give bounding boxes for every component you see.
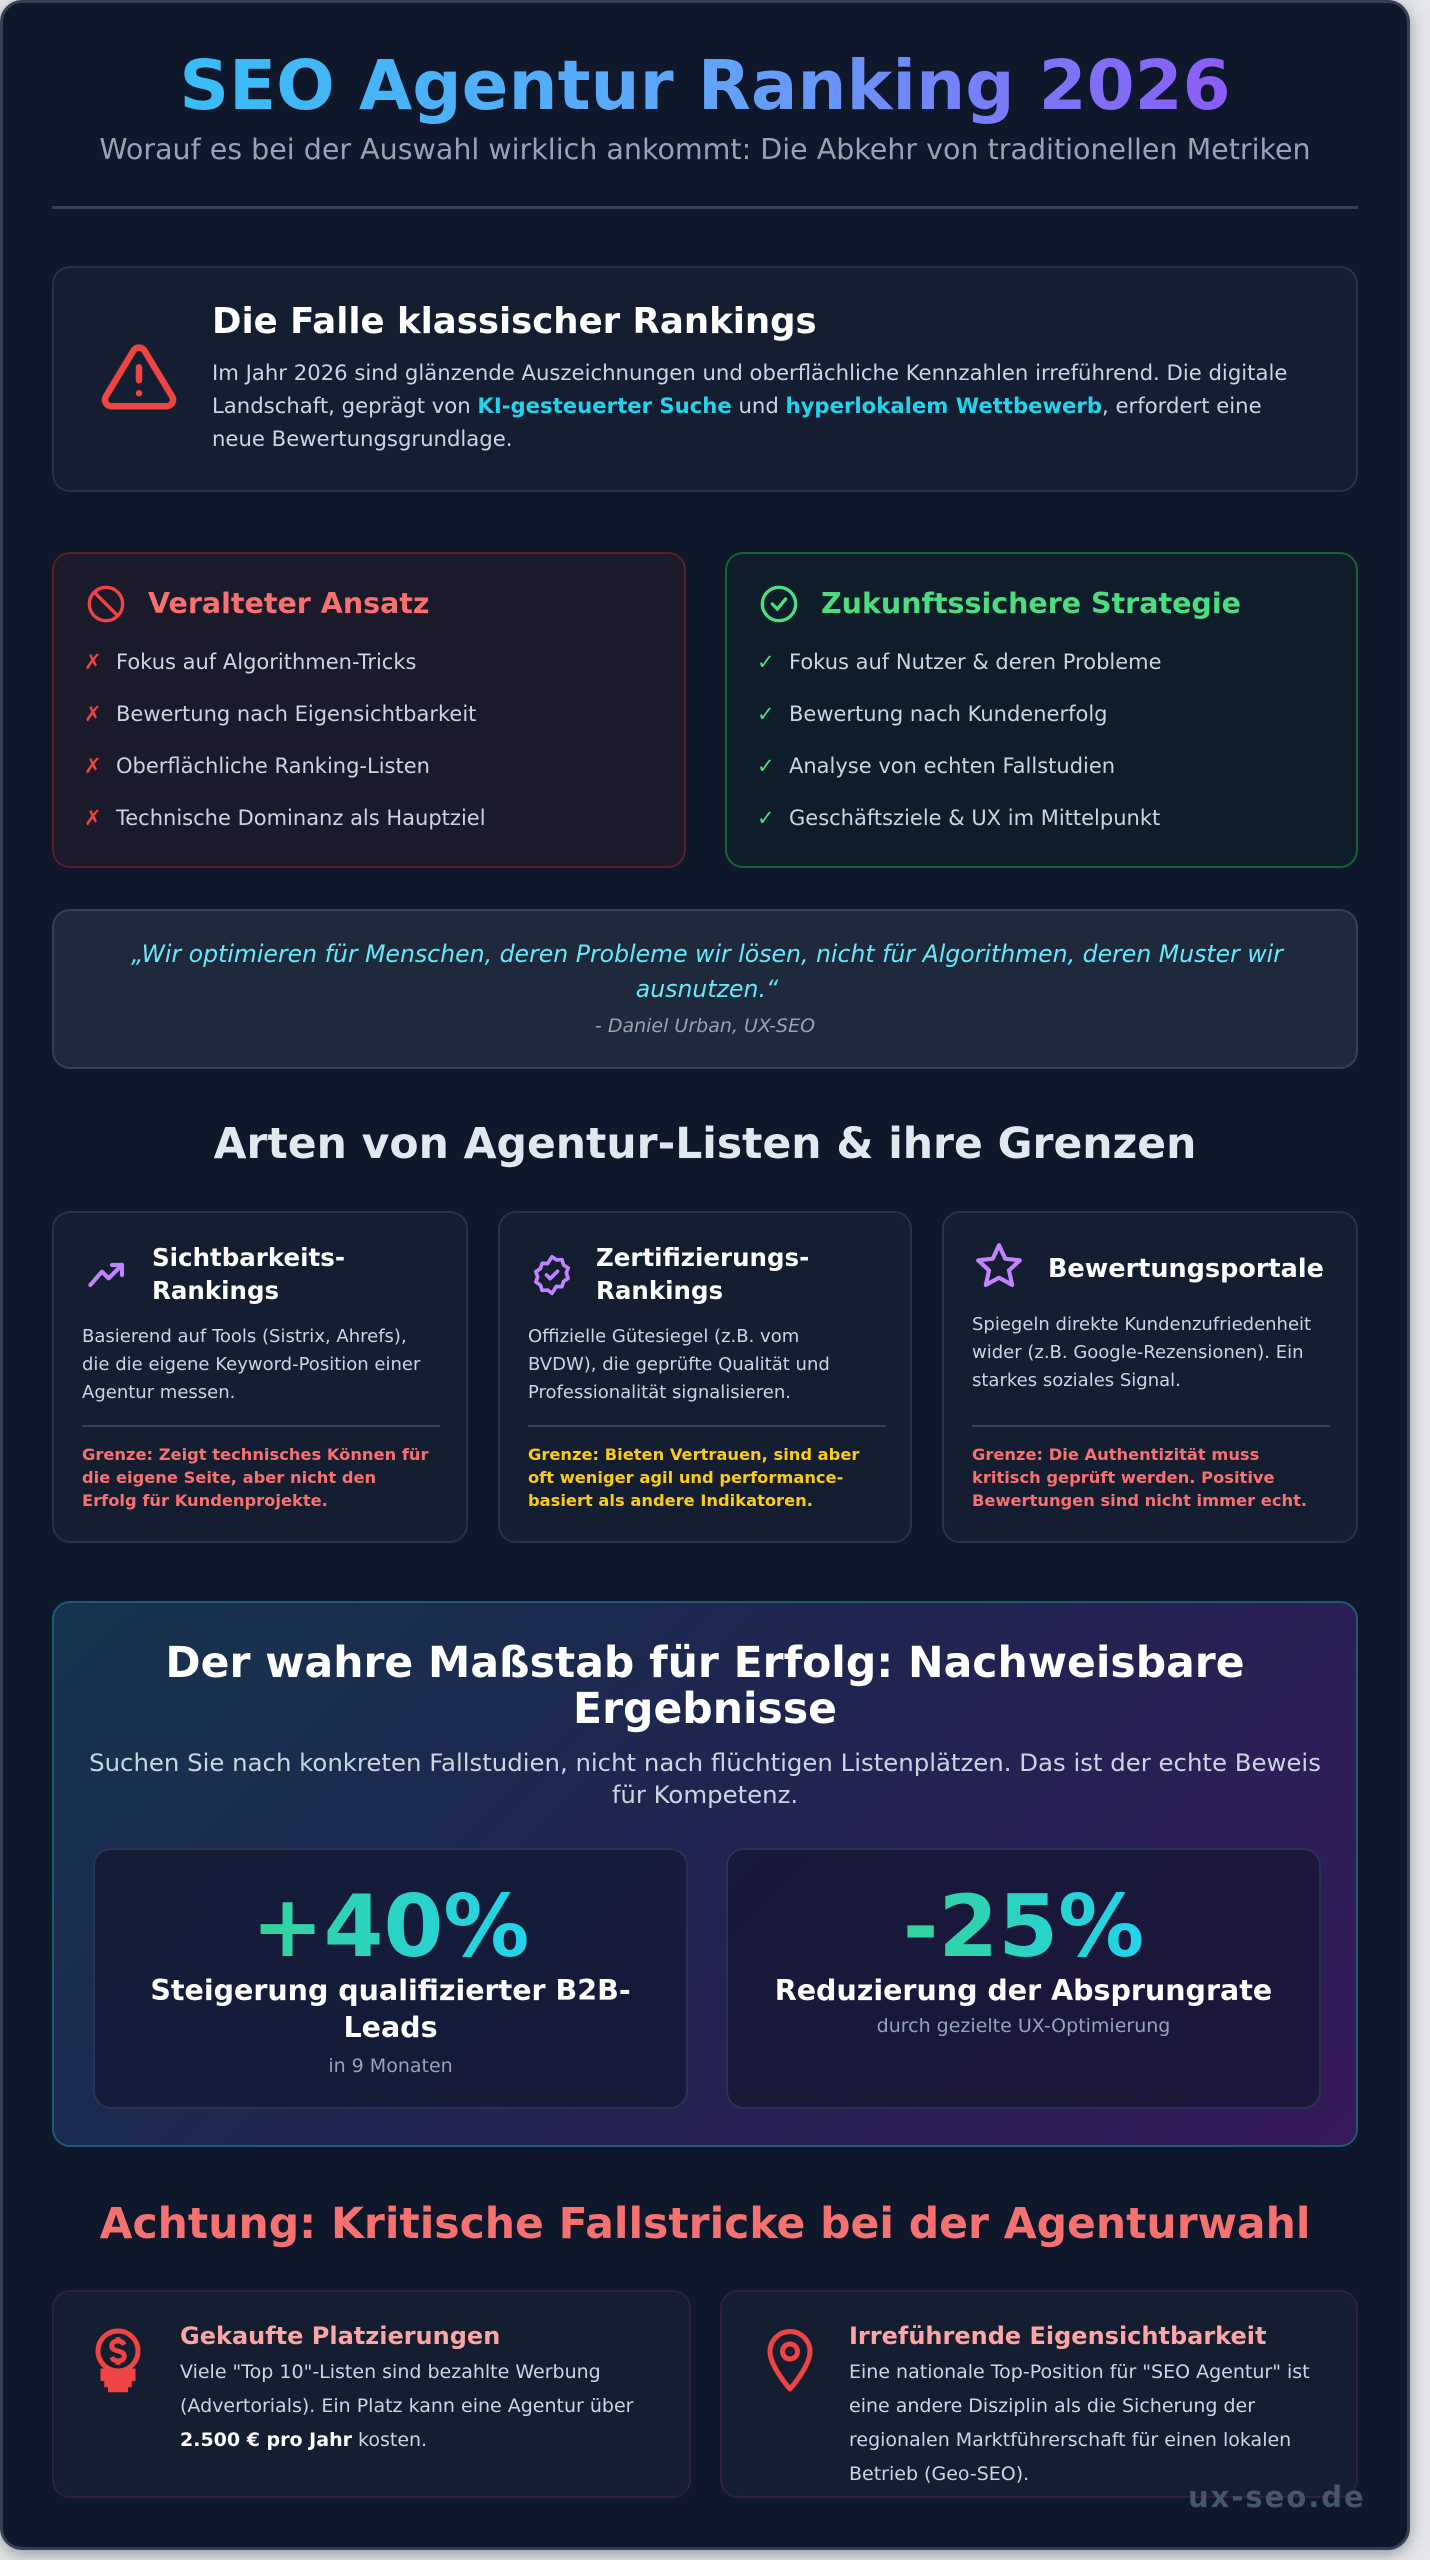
stat: +40%: Steigerung qualifizierter B2B-Leads [150,1974,631,2044]
author: - Daniel Urban, UX-SEO [595,1015,815,1037]
list: Technische Dominanz als Hauptziel [116,806,486,830]
list [757,650,1162,830]
list: Fokus auf Nutzer & deren Probleme [789,650,1162,674]
body text: Im Jahr 2026 sind glänzende Auszeichnungen und oberflächliche Kennzahlen irreführend. Die digitale Landschaft, geprägt von KI-gesteuerter Suche und hyperlokalem Wettbewerb, erfordert eine neue Bewertungsgrundlage. [212,360,1287,451]
icon: trend [88,1262,124,1288]
stat: +40% [93,1848,688,2109]
list: ✗ [84,650,102,674]
card: gekaufte platzierungen [52,2290,691,2498]
heading [596,1243,809,1305]
section heading: achtung: Achtung: Kritische Fallstricke bei der Agenturwahl [100,2200,1310,2249]
subtext: Suchen Sie nach konkreten Fallstudien, nicht nach flüchtigen Listenplätzen. Das ist der echte Beweis für Kompetenz. [89,1748,1321,1809]
icon: badge check [534,1254,570,1296]
title: SEO Agentur Ranking 2026 [179,46,1231,126]
card: irreführende eigensichtbarkeit [720,2290,1358,2498]
list: ✓ [757,806,775,830]
list: Geschäftsziele & UX im Mittelpunkt [789,806,1160,830]
title: Irreführende Eigensichtbarkeit [849,2322,1266,2350]
quote text: „Wir optimieren für Menschen, deren Probleme wir lösen, nicht für Algorithmen, deren Muster wir ausnutzen.“ [131,940,1283,1003]
list: ✓ [757,754,775,778]
heading: Rankings [596,1276,723,1305]
heading: Zertifizierungs- [596,1243,809,1272]
heading: Bewertungsportale [1048,1254,1324,1284]
list: ✓ [757,650,775,674]
stat: +40%: +40% [252,1877,529,1977]
list: Bewertung nach Eigensichtbarkeit [116,702,476,726]
body: Viele "Top 10"-Listen sind bezahlte Werbung (Advertorials). Ein Platz kann eine Agentur über 2.500 € pro Jahr kosten. [180,2361,633,2451]
list [84,650,486,830]
card: zertifizierungs-rankings [498,1211,912,1543]
heading: Der wahre Maßstab für Erfolg: Nachweisbare Ergebnisse [165,1639,1245,1734]
limitation: Grenze: Zeigt technisches Können für die eigene Seite, aber nicht den Erfolg für Kundenprojekte. [82,1445,429,1510]
quote box [52,909,1358,1069]
description: Basierend auf Tools (Sistrix, Ahrefs), die die eigene Keyword-Position einer Agentur messen. [82,1326,420,1403]
card: sichtbarkeits-rankings [52,1211,468,1543]
stat: -25%: -25% [903,1877,1144,1977]
limitation: Grenze: Bieten Vertrauen, sind aber oft weniger agil und performance-basiert als andere Indikatoren. [528,1445,859,1510]
title: Gekaufte Platzierungen [180,2322,500,2350]
list: Analyse von echten Fallstudien [789,754,1115,778]
heading: Sichtbarkeits- [152,1243,345,1272]
list: ✗ [84,702,102,726]
heading [152,1243,345,1305]
card: bewertungsportale [942,1211,1358,1543]
watermark: ux-seo.de [1188,2480,1366,2514]
icon: check circle [760,586,798,622]
subtitle: Worauf es bei der Auswahl wirklich ankommt: Die Abkehr von traditionellen Metriken [99,133,1311,166]
stat: +40%: in 9 Monaten [328,2055,453,2077]
icon: money bulb [96,2328,140,2392]
list: ✗ [84,806,102,830]
panel: veralteter ansatz [52,552,686,868]
limitation: Grenze: Die Authentizität muss kritisch geprüft werden. Positive Bewertungen sind nicht immer echt. [972,1445,1307,1510]
heading: Die Falle klassischer Rankings [212,301,817,342]
heading: Veralteter Ansatz [148,587,430,620]
panel: zukunftssichere strategie [725,552,1358,868]
icon: star [976,1243,1022,1287]
panel: falle klassischer rankings [52,266,1358,492]
stat: -25%: Reduzierung der Absprungrate [775,1974,1272,2007]
icon: ban [88,586,124,622]
stat: -25% [726,1848,1321,2109]
list: Bewertung nach Kundenerfolg [789,702,1108,726]
heading: Rankings [152,1276,279,1305]
list: Oberflächliche Ranking-Listen [116,754,430,778]
list: Fokus auf Algorithmen-Tricks [116,650,416,674]
description: Spiegeln direkte Kundenzufriedenheit wider (z.B. Google-Rezensionen). Ein starkes soziales Signal. [972,1314,1311,1391]
list: ✓ [757,702,775,726]
description: Offizielle Gütesiegel (z.B. vom BVDW), die geprüfte Qualität und Professionalität signalisieren. [528,1326,830,1403]
body: Eine nationale Top-Position für "SEO Agentur" ist eine andere Disziplin als die Sicherung der regionalen Marktführerschaft für einen lokalen Betrieb (Geo-SEO). [849,2361,1310,2485]
stat: -25%: durch gezielte UX-Optimierung [877,2015,1170,2037]
icon: map pin [768,2329,812,2392]
list: ✗ [84,754,102,778]
panel: nachweisbare ergebnisse [52,1601,1358,2147]
section heading: listen: Arten von Agentur-Listen & ihre Grenzen [214,1120,1196,1169]
heading: Zukunftssichere Strategie [821,587,1241,620]
icon: warning triangle [102,344,176,410]
